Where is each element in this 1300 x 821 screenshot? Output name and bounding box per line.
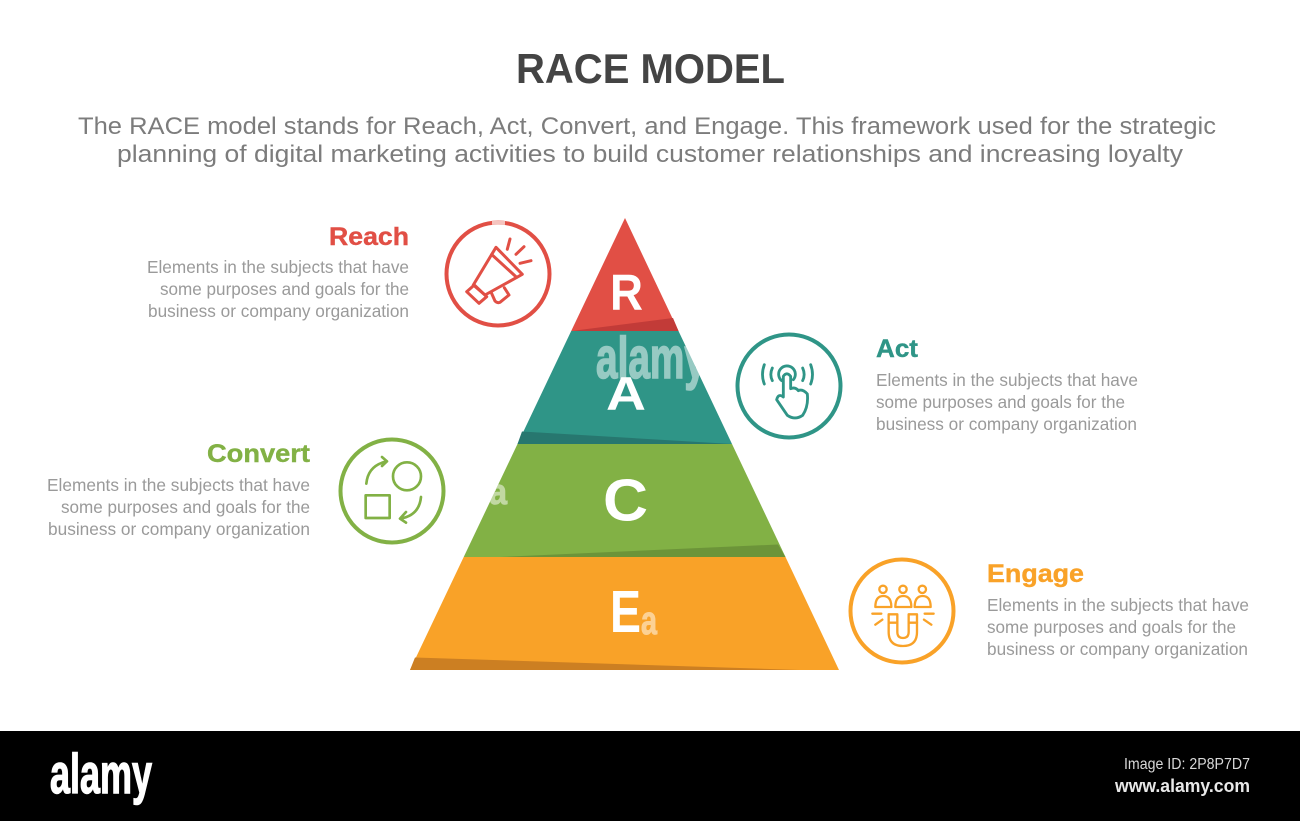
icon: touch hand	[738, 334, 840, 438]
pyramid layer: E: E	[610, 579, 641, 645]
text block: reach: business or company organization	[148, 301, 409, 321]
watermark on pyramid: alamy	[596, 326, 706, 391]
text block: engage: some purposes and goals for the	[987, 617, 1236, 637]
panel: reach	[147, 222, 550, 326]
pyramid letter: A: A	[606, 367, 646, 420]
image id: Image ID: 2P8P7D7	[1124, 756, 1250, 773]
text block: convert: Elements in the subjects that have	[47, 475, 310, 495]
panel: convert	[47, 440, 444, 542]
text block: reach	[147, 257, 409, 321]
panel: engage	[850, 560, 1249, 662]
pyramid layer: E	[410, 557, 839, 670]
pyramid layer: R	[571, 218, 678, 331]
watermark on pyramid	[489, 326, 706, 643]
footer bar	[0, 731, 1300, 821]
title: RACE MODEL	[516, 45, 785, 92]
text block: convert: some purposes and goals for the	[61, 497, 310, 517]
heading: convert: Convert	[207, 440, 311, 468]
text block: reach: Elements in the subjects that have	[147, 257, 409, 277]
text block: engage	[987, 595, 1249, 659]
pyramid layer: C	[464, 444, 786, 557]
panel: act	[738, 334, 1138, 438]
subtitle: The RACE model stands for Reach, Act, Convert, and Engage. This framework used for the strategic	[78, 113, 1216, 140]
text block: reach: some purposes and goals for the	[160, 279, 409, 299]
text block: act: Elements in the subjects that have	[876, 370, 1138, 390]
pyramid layer: A	[518, 331, 732, 444]
text block: convert	[47, 475, 310, 539]
heading: engage: Engage	[987, 560, 1084, 588]
pyramid layer: C: C	[603, 468, 648, 534]
text block: engage: Elements in the subjects that have	[987, 595, 1249, 615]
footer logo: alamy	[50, 742, 152, 805]
text block: act: some purposes and goals for the	[876, 392, 1125, 412]
text block: act	[876, 370, 1138, 434]
heading: act: Act	[876, 335, 919, 363]
subtitle: planning of digital marketing activities to build customer relationships and increasing loyalty	[117, 141, 1183, 168]
pyramid layer: R: R	[610, 264, 643, 321]
watermark on pyramid: a	[489, 471, 508, 512]
text block: act: business or company organization	[876, 414, 1137, 434]
text block: convert: business or company organization	[48, 519, 310, 539]
watermark on pyramid: a	[641, 599, 658, 643]
icon: magnet and people	[850, 560, 954, 662]
text block: engage: business or company organization	[987, 639, 1248, 659]
icon: shapes cycle	[340, 440, 444, 542]
pyramid chart	[410, 218, 839, 670]
subtitle	[78, 113, 1216, 168]
website: www.alamy.com	[1114, 776, 1250, 796]
icon: megaphone	[446, 222, 550, 326]
heading: reach: Reach	[329, 223, 409, 251]
